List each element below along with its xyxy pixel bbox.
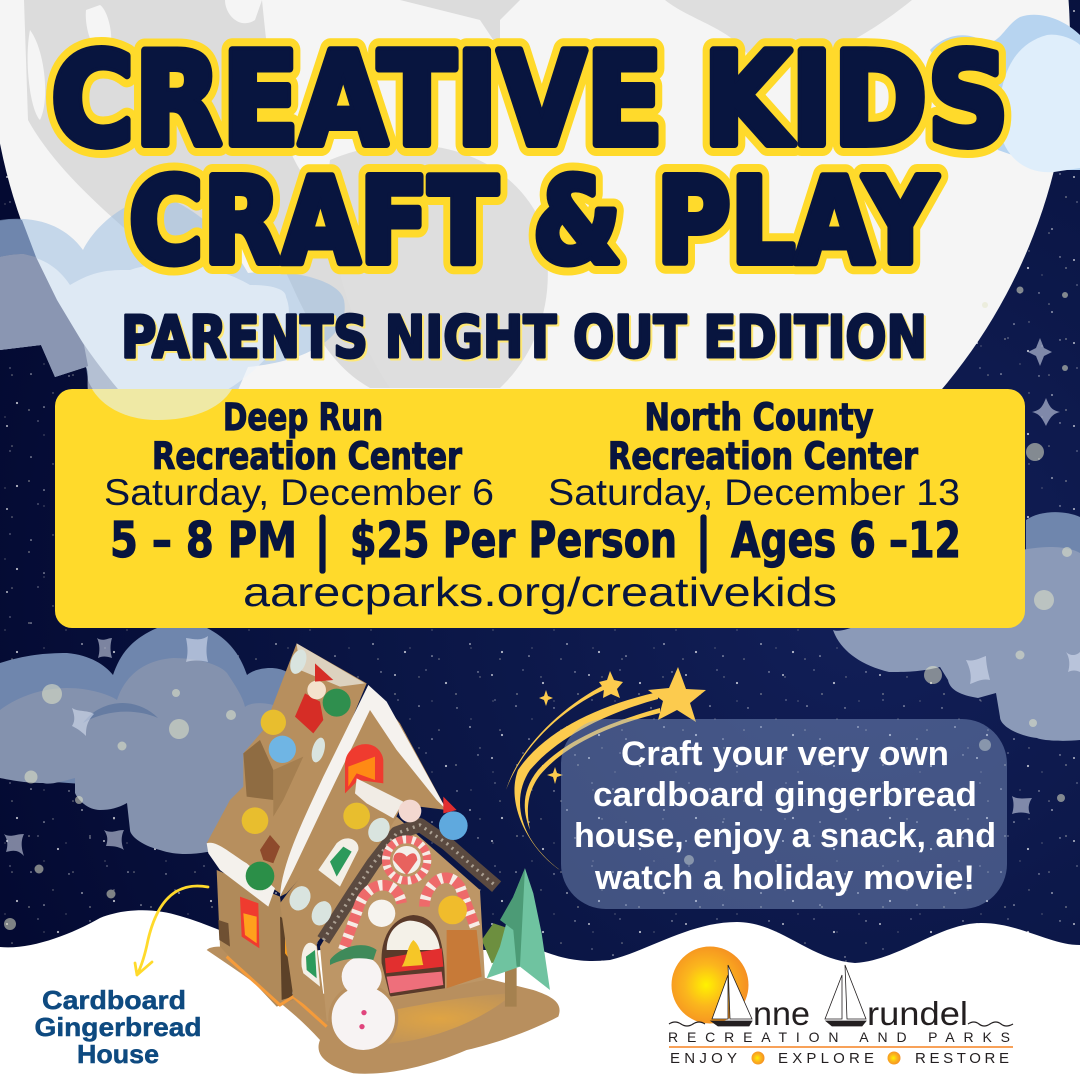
- logo wordmark: nne: [753, 995, 810, 1032]
- sparkles and bokeh lights: [4, 286, 1080, 930]
- logo wordmark: ENJOY: [670, 1050, 740, 1067]
- house caption: House: [77, 1039, 159, 1069]
- callout panel: [561, 719, 1007, 909]
- callout panel: watch a holiday movie!: [594, 859, 975, 897]
- logo sun: [672, 946, 748, 1024]
- title: CRAFT & PLAY: [129, 152, 938, 290]
- left roof: [207, 643, 367, 893]
- cookie ornaments: [286, 647, 394, 929]
- santa: [295, 663, 333, 733]
- right roof plane: [280, 685, 447, 897]
- logo: Anne Arundel Recreation and Parks: [668, 946, 1014, 1067]
- logo waves and rule: [669, 1022, 1013, 1047]
- info panel: [55, 389, 1025, 628]
- event details: $25 Per Person: [350, 512, 677, 569]
- logo wordmark: RECREATION AND PARKS: [668, 1029, 1014, 1045]
- candy canes: [343, 878, 475, 950]
- callout panel: Craft your very own: [621, 735, 949, 773]
- logo wordmark: rundel: [867, 995, 968, 1032]
- pom-poms: [242, 689, 468, 927]
- event details: 5 – 8 PM: [110, 512, 297, 569]
- location: Deep Run: Recreation Center: [152, 435, 463, 478]
- windows: [318, 838, 358, 887]
- location: North County: North County: [644, 396, 874, 439]
- logo dots: [752, 1052, 900, 1064]
- house caption: [34, 985, 202, 1069]
- logo wordmark: [668, 995, 1014, 1067]
- date: December 13: Saturday, December 13: [548, 472, 960, 513]
- event details: [110, 512, 961, 573]
- upper window: [345, 744, 383, 793]
- logo sailboats: [711, 965, 866, 1026]
- cloud: right behind info panel: [833, 512, 1080, 741]
- base board: [207, 947, 560, 1074]
- dotted trim: [323, 825, 497, 940]
- title: [51, 26, 1009, 290]
- snow hills: [0, 910, 1080, 1080]
- cloud: upper right over moon: [930, 15, 1080, 172]
- location: Deep Run: [152, 396, 463, 478]
- location: North County: Recreation Center: [608, 435, 919, 478]
- full moon: [0, 0, 1070, 580]
- logo wordmark: EXPLORE: [778, 1050, 877, 1067]
- rear walls: [217, 870, 293, 1007]
- house caption: Cardboard: [42, 985, 186, 1015]
- cloud: left lower: [0, 628, 300, 854]
- reindeer: [447, 930, 482, 988]
- icon: shooting stars: [506, 667, 706, 870]
- title: CRAFT & PLAY: [129, 152, 938, 290]
- front wall: [320, 817, 485, 1022]
- subtitle: PARENTS NIGHT OUT EDITION: [121, 303, 927, 371]
- door: [382, 915, 445, 997]
- subtitle: PARENTS NIGHT OUT EDITION: [123, 305, 929, 373]
- website: aarecparks.org/creativekids: [243, 569, 837, 615]
- event details: Ages 6 –12: [731, 512, 961, 569]
- arrow: [135, 886, 208, 975]
- tree: [482, 868, 550, 1007]
- date: December 6: Saturday, December 6: [104, 472, 494, 513]
- snowman: [330, 945, 397, 1052]
- house caption: Gingerbread: [34, 1012, 202, 1042]
- location: North County: [608, 396, 919, 478]
- cloud: left over moon: [0, 197, 345, 420]
- front roof plane: [280, 780, 403, 1020]
- peppermint heart: [386, 800, 427, 881]
- callout panel: cardboard gingerbread: [593, 776, 977, 814]
- illustration: cardboard gingerbread house: [207, 643, 560, 1074]
- callout panel: house, enjoy a snack, and: [574, 817, 996, 855]
- logo wordmark: RESTORE: [915, 1050, 1012, 1067]
- gingerbread cookie: [260, 835, 280, 863]
- location: Deep Run: Deep Run: [223, 396, 383, 439]
